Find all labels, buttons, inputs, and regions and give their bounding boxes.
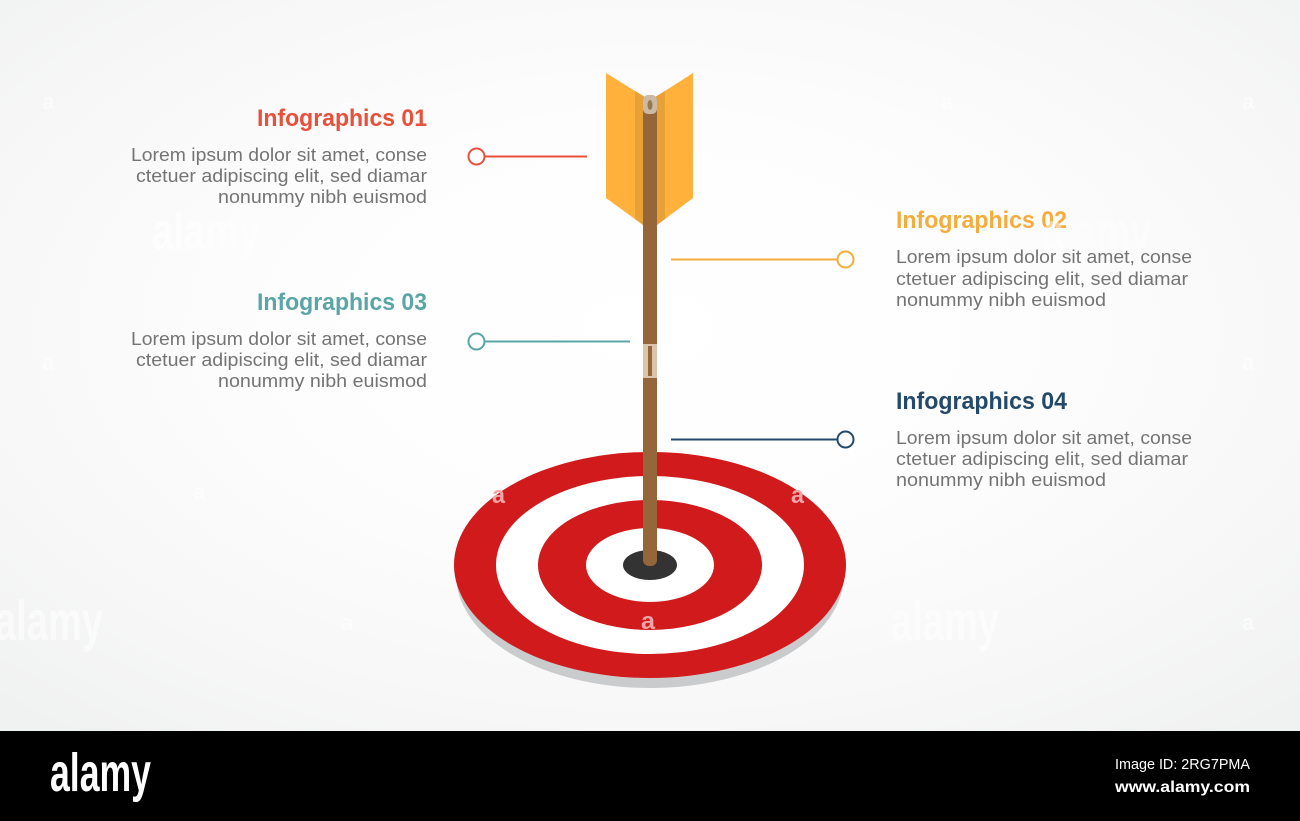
- callout 01: [131, 105, 587, 207]
- text 04: ctetuer adipiscing elit, sed diamar: [896, 449, 1188, 469]
- text 01: ctetuer adipiscing elit, sed diamar: [136, 166, 427, 186]
- target: [454, 452, 846, 688]
- right fletching: [657, 73, 693, 225]
- heading 01: Infographics 01: [257, 105, 427, 132]
- text 04: Lorem ipsum dolor sit amet, conse: [896, 428, 1192, 448]
- inner red ring: [538, 500, 762, 630]
- text 03: Lorem ipsum dolor sit amet, conse: [131, 329, 427, 349]
- text 02: [896, 247, 1192, 310]
- watermarks: a: [1242, 350, 1255, 375]
- watermarks: alamy: [891, 589, 999, 652]
- watermarks: a: [42, 89, 55, 114]
- text 04: nonummy nibh euismod: [896, 470, 1106, 490]
- text 01: [131, 145, 427, 207]
- bullseye: [623, 550, 677, 580]
- left fletching: [606, 73, 643, 225]
- heading 03: Infographics 03: [257, 289, 427, 316]
- heading 04: Infographics 04: [896, 388, 1068, 415]
- text 01: nonummy nibh euismod: [218, 187, 427, 207]
- watermarks: alamy: [152, 203, 260, 261]
- outer red ring: [454, 452, 846, 678]
- watermarks: a: [941, 89, 954, 114]
- text 01: Lorem ipsum dolor sit amet, conse: [131, 145, 427, 165]
- target watermarks: a: [641, 608, 656, 635]
- callout 02: [671, 207, 1192, 310]
- text 04: [896, 428, 1192, 490]
- shaft watermark glyph: [648, 346, 652, 376]
- watermarks: a: [941, 350, 954, 375]
- watermarks: [0, 89, 1255, 652]
- text 03: [131, 329, 427, 391]
- target watermarks: [492, 482, 805, 635]
- shaft watermark: [643, 344, 657, 378]
- watermarks: a: [1242, 610, 1255, 635]
- text 02: Lorem ipsum dolor sit amet, conse: [896, 247, 1192, 267]
- website: www.alamy.com: [1114, 779, 1250, 796]
- footer bar: [0, 731, 1300, 821]
- watermarks: a: [42, 350, 55, 375]
- connector 01: [468, 148, 587, 164]
- connector 04: [671, 432, 854, 448]
- shaft: [643, 95, 657, 566]
- arrow: [606, 73, 693, 566]
- watermarks: a: [193, 479, 206, 504]
- overlay watermark: alamy: [1043, 203, 1151, 261]
- outer white ring: [496, 476, 804, 654]
- target watermarks: a: [791, 482, 805, 509]
- watermarks: a: [342, 89, 355, 114]
- inner white ring: [586, 528, 714, 602]
- text 03: nonummy nibh euismod: [218, 371, 427, 391]
- watermarks: a: [341, 610, 354, 635]
- target shadow: [456, 462, 844, 688]
- nock highlight: [643, 95, 657, 114]
- footer logo: alamy: [50, 743, 151, 803]
- heading 02: Infographics 02: [896, 207, 1067, 234]
- fletching fold shading: [635, 91, 665, 230]
- text 02: ctetuer adipiscing elit, sed diamar: [896, 269, 1188, 289]
- callout 03: [131, 289, 630, 391]
- watermarks: a: [1242, 89, 1255, 114]
- connector 02: [671, 252, 854, 268]
- callout 04: [671, 388, 1192, 490]
- text 02: nonummy nibh euismod: [896, 290, 1106, 310]
- text 03: ctetuer adipiscing elit, sed diamar: [136, 350, 427, 370]
- nock watermark mark: [648, 100, 652, 110]
- image id: Image ID: 2RG7PMA: [1115, 756, 1250, 773]
- connector 03: [468, 334, 630, 350]
- target watermarks: a: [492, 482, 506, 509]
